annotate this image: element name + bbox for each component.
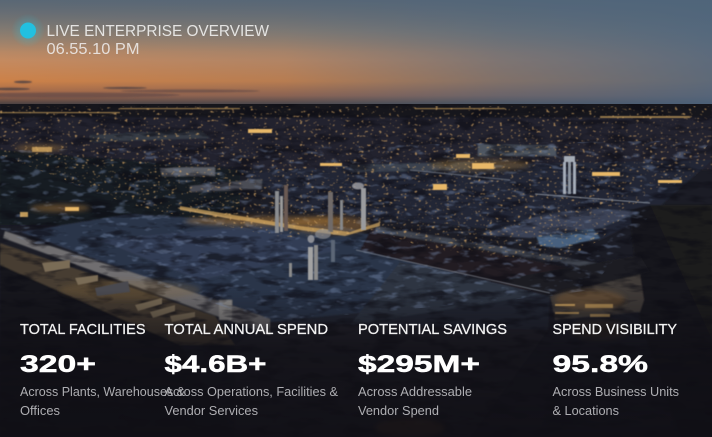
stat: spend visibility: Across Business Units	[552, 385, 679, 399]
stat: potential savings: Vendor Spend	[358, 404, 439, 418]
stat: total facilities: TOTAL FACILITIES	[20, 322, 146, 338]
stat: spend visibility: SPEND VISIBILITY	[552, 322, 677, 338]
lit building rows	[0, 108, 690, 317]
stat: total annual spend: $4.6B+	[164, 351, 266, 378]
smokestacks and steam	[275, 182, 366, 280]
timestamp: 06.55.10 PM	[46, 41, 140, 58]
heading: live enterprise overview: LIVE ENTERPRISE OVERVIEW	[46, 23, 269, 40]
loading yard	[0, 243, 235, 345]
far city	[2, 104, 710, 116]
background: dusk sky	[0, 0, 712, 104]
stat: total annual spend: Across Operations, Facilities &	[164, 385, 339, 399]
stat: potential savings	[358, 322, 507, 418]
second roof section	[360, 234, 562, 294]
stat: total facilities	[20, 322, 186, 418]
stat: total facilities: 320+	[20, 351, 96, 378]
main plant roof	[21, 214, 450, 322]
icon: live indicator dot	[11, 14, 45, 48]
water tower	[563, 156, 576, 194]
roof and yard mottling	[0, 117, 712, 344]
stat: spend visibility	[552, 322, 679, 418]
stat: total facilities: Across Plants, Warehouses &	[20, 385, 186, 399]
stat: total facilities: Offices	[20, 404, 60, 418]
stat: potential savings: $295M+	[358, 351, 480, 378]
warm glow	[14, 142, 626, 336]
background: aerial view of industrial complex	[0, 103, 712, 437]
warehouse loading trucks	[42, 260, 195, 322]
stat: total annual spend: Vendor Services	[164, 404, 258, 418]
stat: potential savings: Across Addressable	[358, 385, 472, 399]
mid dark field	[162, 166, 216, 177]
stat: spend visibility: 95.8%	[552, 351, 648, 378]
white roof lines	[178, 170, 650, 293]
scattered city lights	[0, 104, 712, 274]
stat: spend visibility: & Locations	[552, 404, 619, 418]
stat: potential savings: POTENTIAL SAVINGS	[358, 322, 507, 338]
blue roofs	[535, 225, 600, 248]
stat: total annual spend: TOTAL ANNUAL SPEND	[164, 322, 328, 338]
right field	[650, 205, 710, 297]
long plant wall	[3, 231, 270, 335]
pale roofs	[478, 144, 556, 156]
header: live status	[11, 14, 269, 58]
right-hand building with lit windows	[550, 274, 644, 320]
stat: total annual spend	[164, 322, 339, 418]
